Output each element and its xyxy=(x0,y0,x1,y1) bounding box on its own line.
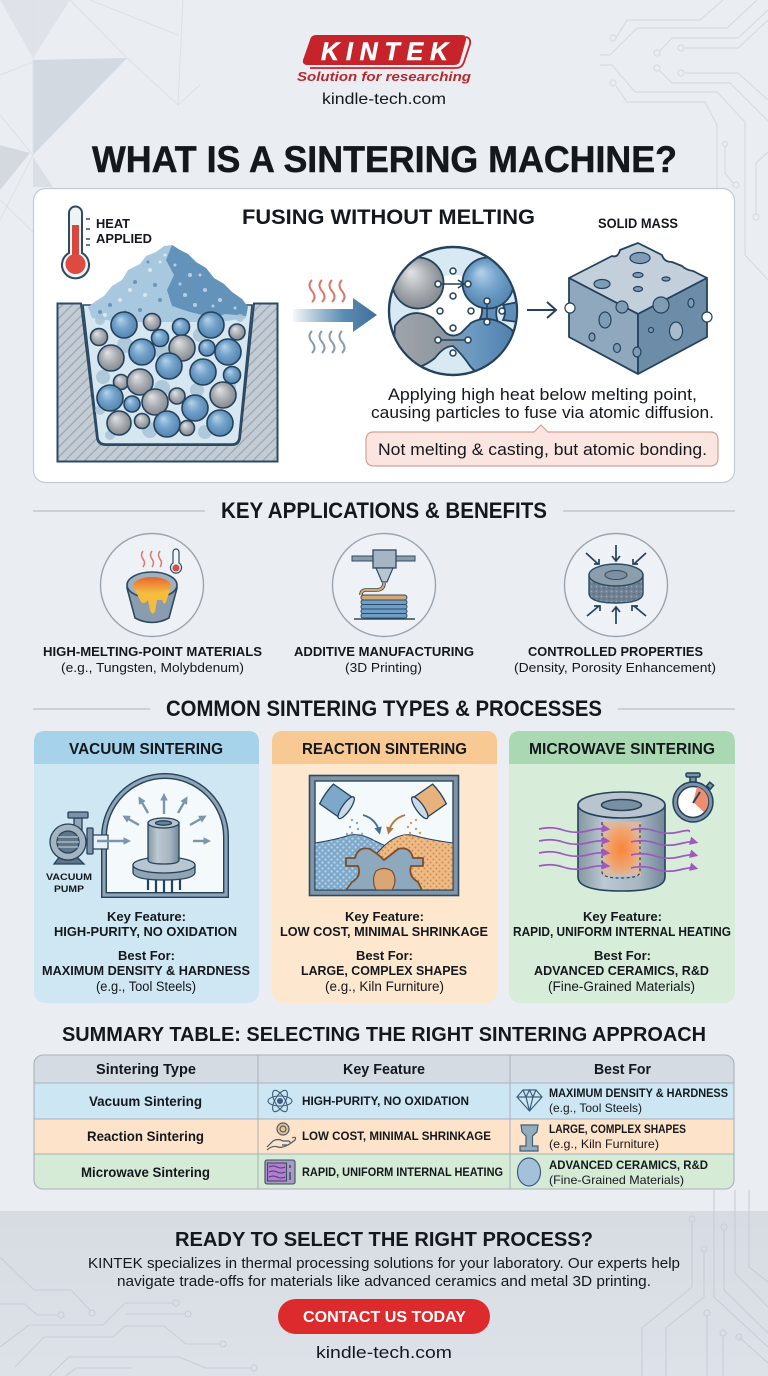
table header: Sintering Type xyxy=(96,1062,196,1078)
icon: diamond xyxy=(517,1090,542,1111)
label: vacuum pump: PUMP xyxy=(54,884,85,895)
best for text: Best For: xyxy=(594,948,651,963)
best for text: MAXIMUM DENSITY & HARDNESS xyxy=(42,963,250,978)
panel: vacuum sintering xyxy=(34,731,259,1003)
cylinder xyxy=(578,792,665,891)
summary table xyxy=(34,1055,734,1189)
diagram: solid porous cube xyxy=(565,243,712,374)
label: heat applied: APPLIED xyxy=(96,232,152,246)
best for text xyxy=(301,948,467,994)
callout: not melting: Not melting & casting, but atomic bonding. xyxy=(378,440,707,459)
label: heat applied: HEAT xyxy=(96,217,130,231)
card header xyxy=(509,731,735,764)
key feature text xyxy=(280,909,488,939)
logo website: kindle-tech.com xyxy=(322,91,446,108)
row: reaction sintering: (e.g., Kiln Furniture) xyxy=(549,1137,659,1151)
falling powder xyxy=(346,819,363,838)
footer body text xyxy=(88,1256,680,1290)
footer website: kindle-tech.com xyxy=(316,1343,452,1362)
label: CONTROLLED PROPERTIES xyxy=(528,644,703,659)
key feature text: LOW COST, MINIMAL SHRINKAGE xyxy=(280,924,488,939)
label: vacuum pump xyxy=(46,872,92,895)
row: microwave sintering: ADVANCED CERAMICS, R&D xyxy=(549,1158,708,1172)
card header xyxy=(272,731,497,764)
crucible with particles xyxy=(58,245,278,462)
spheres xyxy=(90,312,245,437)
footer body text: navigate trade-offs for materials like advanced ceramics and metal 3D printing. xyxy=(117,1274,651,1290)
label: HIGH-MELTING-POINT MATERIALS xyxy=(43,644,262,659)
description text: Applying high heat below melting point, xyxy=(388,385,697,404)
key feature text xyxy=(54,909,237,939)
row: reaction sintering: LARGE, COMPLEX SHAPES xyxy=(549,1122,686,1136)
key feature text: Key Feature: xyxy=(583,909,662,924)
sublabel: (3D Printing) xyxy=(345,660,422,675)
key feature text: HIGH-PURITY, NO OXIDATION xyxy=(54,924,237,939)
heat waves xyxy=(310,280,344,353)
heading: key applications: KEY APPLICATIONS & BENEFITS xyxy=(221,498,547,523)
blue powder hill xyxy=(315,834,384,890)
card header xyxy=(34,731,259,764)
key feature text: Key Feature: xyxy=(107,909,186,924)
icon: microwave oven xyxy=(265,1160,295,1184)
heated core xyxy=(602,822,641,878)
illustration: vacuum chamber and pump xyxy=(50,776,226,895)
sublabel: (Density, Porosity Enhancement) xyxy=(514,660,716,675)
card header: VACUUM SINTERING xyxy=(69,741,223,758)
section rule lines xyxy=(33,511,735,709)
best for text xyxy=(42,948,250,994)
panel: microwave sintering xyxy=(509,731,735,1003)
logo badge xyxy=(303,35,470,68)
arrow: process xyxy=(293,298,377,332)
heading: common sintering types: COMMON SINTERING TYPES & PROCESSES xyxy=(166,696,602,721)
description text xyxy=(371,385,714,422)
table header: Key Feature xyxy=(343,1062,425,1078)
workpiece column xyxy=(133,818,195,892)
best for text: (e.g., Kiln Furniture) xyxy=(325,979,444,994)
button: contact us today xyxy=(278,1299,490,1334)
heading: summary table: SUMMARY TABLE: SELECTING THE RIGHT SINTERING APPROACH xyxy=(62,1023,706,1046)
row: vacuum sintering: (e.g., Tool Steels) xyxy=(549,1101,642,1115)
sublabel: (e.g., Tungsten, Molybdenum) xyxy=(61,660,244,675)
row: reaction sintering xyxy=(87,1122,686,1151)
table header xyxy=(96,1062,651,1078)
best for text xyxy=(534,948,709,994)
best for text: (e.g., Tool Steels) xyxy=(96,979,196,994)
row: vacuum sintering xyxy=(89,1086,728,1115)
footer heading: READY TO SELECT THE RIGHT PROCESS? xyxy=(175,1229,593,1251)
label: vacuum pump: VACUUM xyxy=(46,872,92,883)
card header: MICROWAVE SINTERING xyxy=(529,741,715,758)
illustration: microwave heating xyxy=(539,773,714,891)
heading: fusing without melting: FUSING WITHOUT MELTING xyxy=(242,206,535,229)
fused shape xyxy=(346,848,423,890)
vacuum arrows xyxy=(97,796,208,841)
diagram: atomic diffusion close-up xyxy=(389,247,522,377)
row: reaction sintering: LOW COST, MINIMAL SHRINKAGE xyxy=(302,1129,491,1143)
microwaves xyxy=(539,828,695,871)
icon: molten crucible xyxy=(100,534,204,636)
button: contact us today: CONTACT US TODAY xyxy=(303,1309,466,1326)
best for text: Best For: xyxy=(356,948,413,963)
logo badge: KINTEK xyxy=(321,38,450,66)
card header: REACTION SINTERING xyxy=(302,741,467,758)
table background rows xyxy=(34,1055,734,1189)
icon: hand with coin xyxy=(267,1123,296,1150)
icon: atom xyxy=(268,1088,292,1114)
logo tagline: Solution for researching xyxy=(297,70,471,84)
reaction arrows xyxy=(363,815,379,831)
decorative background shapes xyxy=(0,0,768,280)
blue pouring cup xyxy=(318,783,357,821)
row: reaction sintering: Reaction Sintering xyxy=(87,1128,204,1144)
orange pouring cup xyxy=(409,783,448,821)
illustration: reaction chamber xyxy=(310,776,458,896)
best for text: (Fine-Grained Materials) xyxy=(548,979,695,994)
key feature text: RAPID, UNIFORM INTERNAL HEATING xyxy=(513,924,731,939)
loose powder behind spheres xyxy=(95,314,244,440)
label: heat applied xyxy=(96,217,152,246)
icon: ceramic disc xyxy=(518,1158,540,1186)
key feature text xyxy=(513,909,731,939)
panel: footer call to action xyxy=(0,1190,768,1376)
best for text: LARGE, COMPLEX SHAPES xyxy=(301,963,467,978)
application: additive manufacturing xyxy=(294,534,474,675)
label: solid mass: SOLID MASS xyxy=(598,216,678,231)
icon: kiln furniture xyxy=(520,1125,538,1151)
description text: causing particles to fuse via atomic diffusion. xyxy=(371,403,714,422)
icon: compressed ring xyxy=(564,534,668,636)
row: vacuum sintering: MAXIMUM DENSITY & HARDNESS xyxy=(549,1086,728,1100)
panel: reaction sintering xyxy=(272,731,497,1003)
row: microwave sintering: RAPID, UNIFORM INTERNAL HEATING xyxy=(302,1165,503,1179)
main title: WHAT IS A SINTERING MACHINE? xyxy=(92,139,677,180)
label: ADDITIVE MANUFACTURING xyxy=(294,644,474,659)
powder pile xyxy=(88,245,248,322)
logo xyxy=(297,35,471,108)
panel: fusing without melting xyxy=(34,188,734,482)
row: microwave sintering xyxy=(81,1158,708,1187)
icon: 3D printer xyxy=(332,534,436,636)
icon: thermometer xyxy=(62,207,90,278)
best for text: Best For: xyxy=(118,948,175,963)
row: vacuum sintering: HIGH-PURITY, NO OXIDATION xyxy=(302,1094,469,1108)
application: high-melting-point materials xyxy=(43,534,262,675)
orange powder hill xyxy=(376,834,453,890)
vacuum pump xyxy=(50,812,93,864)
application: controlled properties xyxy=(514,534,716,675)
row: microwave sintering: (Fine-Grained Materials) xyxy=(549,1173,684,1187)
footer body text: KINTEK specializes in thermal processing solutions for your laboratory. Our experts help xyxy=(88,1256,680,1272)
row: vacuum sintering: Vacuum Sintering xyxy=(89,1093,202,1109)
callout: not melting xyxy=(366,425,718,466)
table header: Best For xyxy=(594,1062,651,1078)
best for text: ADVANCED CERAMICS, R&D xyxy=(534,963,709,978)
row: microwave sintering: Microwave Sintering xyxy=(81,1164,210,1180)
arrow: to solid mass xyxy=(527,302,556,318)
icon: stopwatch xyxy=(673,773,714,822)
key feature text: Key Feature: xyxy=(345,909,424,924)
